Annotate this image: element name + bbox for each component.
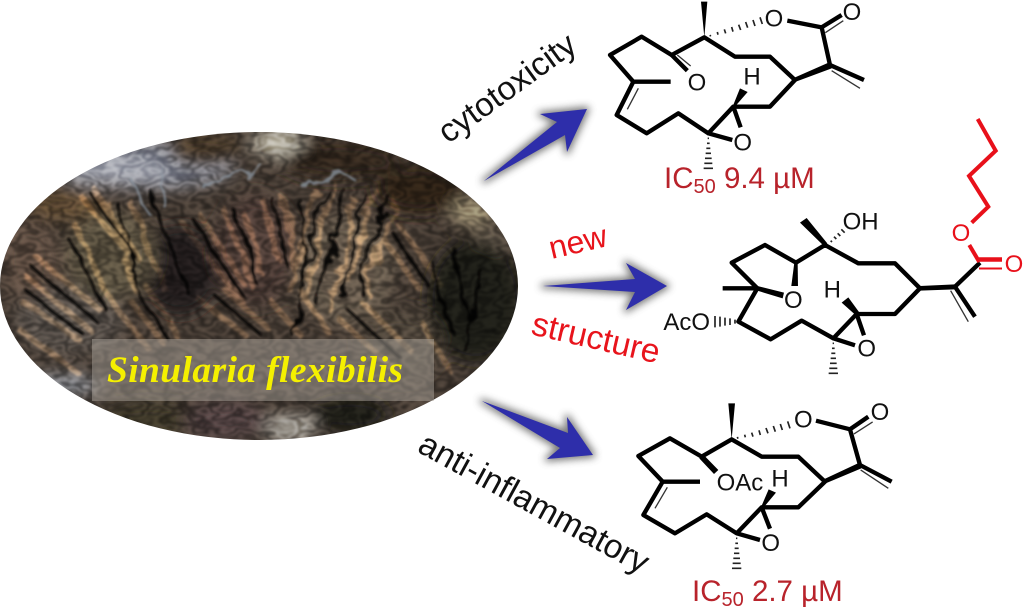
molecule: cytotoxic compound: O xyxy=(733,129,752,156)
IC50 value: 9.4 µM: 9.4 µM xyxy=(716,162,815,195)
molecule: new structure: O xyxy=(857,336,876,363)
texture: coral fingers xyxy=(20,185,480,375)
label band: species name xyxy=(92,339,434,401)
label: cytotoxicity: cytotoxicity xyxy=(430,25,583,150)
arrow: to anti-inflammatory compound xyxy=(482,401,593,459)
molecule: cytotoxic compound: H xyxy=(743,64,761,91)
red ester chain: O xyxy=(952,220,970,247)
molecule: new structure: OH xyxy=(843,208,879,235)
label band: species name: Sinularia flexibilis xyxy=(107,350,403,391)
molecule: cytotoxic compound: O xyxy=(765,6,783,33)
red ester chain xyxy=(952,119,1023,278)
arrow: to new structure xyxy=(543,263,667,310)
IC50 value: 9.4 µM: IC xyxy=(664,162,694,195)
label: anti-inflammatory: anti-inflammatory xyxy=(412,426,656,582)
red ester chain: O xyxy=(1005,251,1023,278)
molecule: anti-inflammatory compound: OAc xyxy=(717,470,763,497)
molecule: anti-inflammatory compound: H xyxy=(771,466,789,493)
texture: wrinkled folds xyxy=(0,130,520,442)
molecule: new structure: O xyxy=(784,287,803,314)
IC50 value: 2.7 µM: 2.7 µM xyxy=(744,575,843,608)
molecule: anti-inflammatory compound: O xyxy=(761,530,780,557)
molecule: cytotoxic compound xyxy=(610,0,864,168)
molecule: anti-inflammatory compound xyxy=(638,399,892,568)
IC50 value: 9.4 µM: 50 xyxy=(694,176,716,198)
arrow: to cytotoxic compound xyxy=(484,109,587,181)
photo: soft coral in oval frame xyxy=(0,130,523,442)
molecule: new structure: AcO xyxy=(663,309,710,336)
molecule: anti-inflammatory compound: O xyxy=(871,399,889,426)
molecule: new structure xyxy=(663,208,980,373)
IC50 value: 2.7 µM: IC xyxy=(692,575,722,608)
label: structure: structure xyxy=(528,306,664,371)
molecule: anti-inflammatory compound: O xyxy=(794,406,813,433)
label: new: new xyxy=(545,217,611,266)
molecule: new structure: H xyxy=(824,276,841,303)
molecule: cytotoxic compound: O xyxy=(688,69,706,96)
water ripples xyxy=(130,165,355,215)
